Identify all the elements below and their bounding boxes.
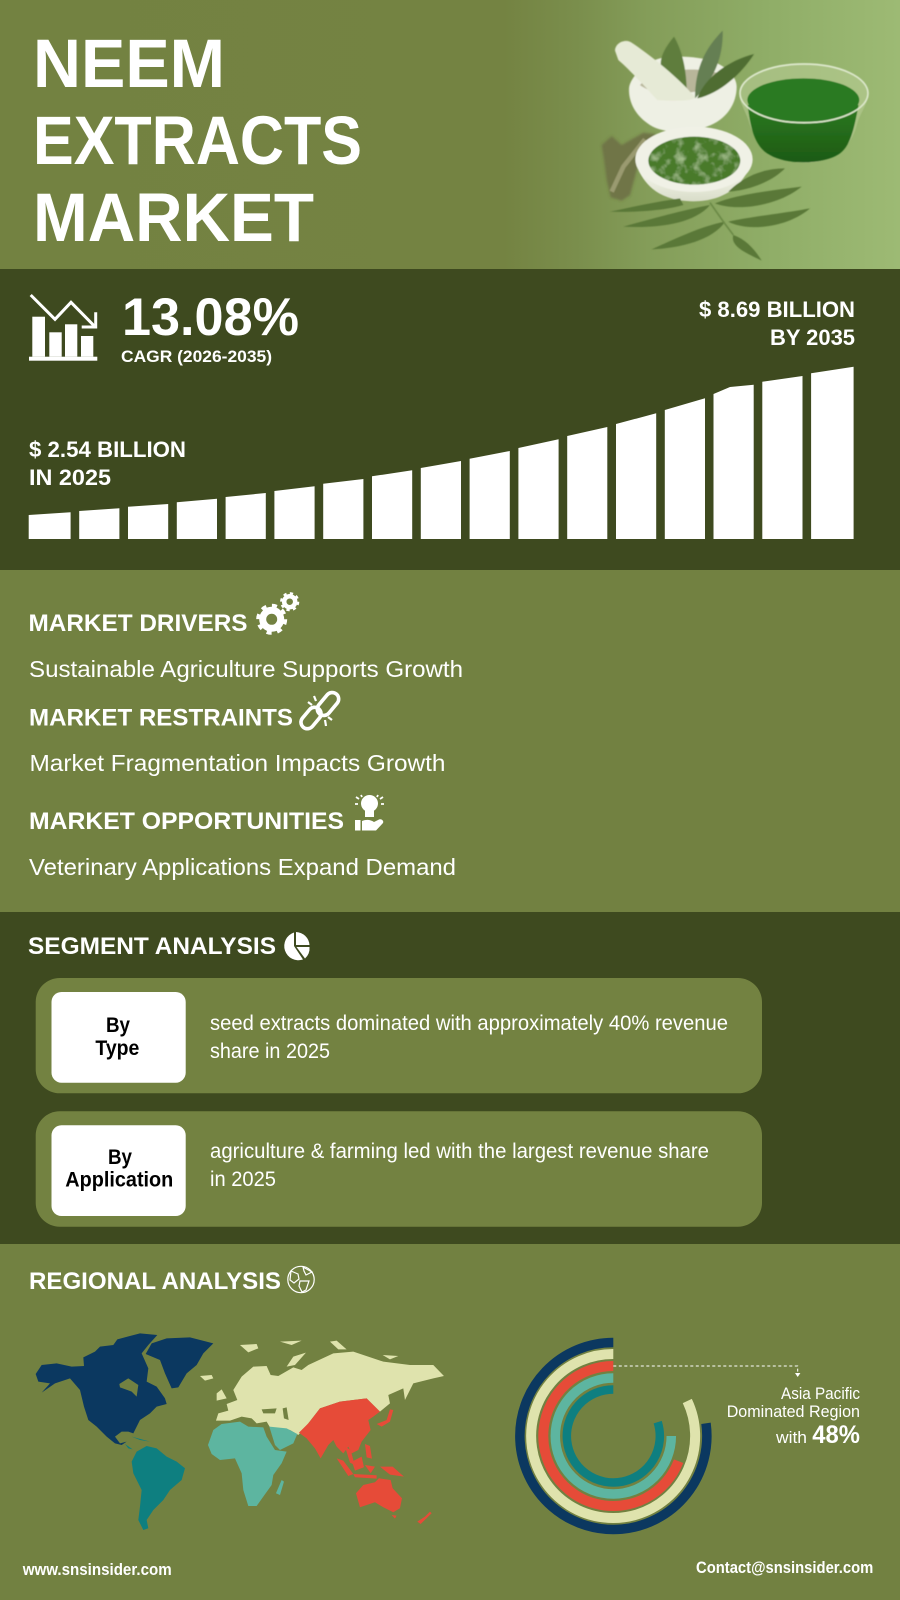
card: by type xyxy=(36,978,762,1093)
label: by application xyxy=(52,1125,186,1216)
start value label: $ 2.54 BILLION xyxy=(29,437,186,462)
CAGR label: CAGR (2026-2035) xyxy=(121,347,272,366)
map: North America xyxy=(36,1333,213,1445)
radial chart xyxy=(520,1342,707,1530)
callout line: Asia Pacific xyxy=(613,1366,800,1377)
label: by application: Application xyxy=(65,1168,173,1192)
panel: segment analysis xyxy=(0,912,900,1244)
callout: dominated region: with xyxy=(775,1429,807,1447)
callout: dominated region: Asia Pacific xyxy=(781,1385,860,1403)
mortar xyxy=(629,57,737,132)
icon: broken chain xyxy=(298,690,341,731)
start value label xyxy=(29,437,186,490)
callout: dominated region: Dominated Region xyxy=(727,1403,860,1421)
leaves in mortar xyxy=(661,37,687,88)
end value label: $ 8.69 BILLION xyxy=(699,297,855,322)
end value label: BY 2035 xyxy=(770,325,855,350)
text: driver: Sustainable Agriculture Supports Growth xyxy=(29,656,463,682)
seas xyxy=(262,1407,289,1420)
icon: bulb in hand xyxy=(355,795,384,830)
text: by type: share in 2025 xyxy=(210,1040,330,1063)
Hudson Bay xyxy=(119,1378,138,1397)
photo: neem mortar, bowls and leaves xyxy=(602,31,869,261)
title: NEEM xyxy=(33,25,225,102)
text: by type: seed extracts dominated with approximately 40% revenue xyxy=(210,1012,728,1035)
icon: pie chart xyxy=(284,932,310,960)
title: MARKET xyxy=(33,179,314,256)
map: Europe and North Asia xyxy=(200,1341,444,1435)
callout: dominated region: 48% xyxy=(812,1421,860,1449)
end value label xyxy=(699,297,855,350)
heading: segment analysis: SEGMENT ANALYSIS xyxy=(28,933,276,960)
icon: CAGR chart xyxy=(29,295,97,361)
card: by application xyxy=(36,1111,762,1227)
glass bowl xyxy=(739,63,869,163)
title: EXTRACTS xyxy=(33,102,362,179)
icon: globe xyxy=(288,1266,314,1293)
heading: market drivers: MARKET DRIVERS xyxy=(28,610,248,637)
twigs xyxy=(602,133,656,201)
label: by type: By xyxy=(106,1013,130,1037)
label: by type xyxy=(52,992,186,1083)
label: by application: By xyxy=(108,1145,132,1169)
title xyxy=(33,25,362,256)
text: by application: in 2025 xyxy=(210,1168,276,1191)
text: restraint: Market Fragmentation Impacts Growth xyxy=(30,750,446,776)
icon: gears xyxy=(258,593,298,633)
map: South America xyxy=(125,1437,185,1530)
neem leaves bottom xyxy=(610,168,810,261)
heading: regional analysis: REGIONAL ANALYSIS xyxy=(29,1268,281,1295)
callout: dominated region xyxy=(727,1385,860,1449)
market size panel xyxy=(0,269,900,570)
bar chart: market growth xyxy=(29,367,854,539)
start value label: IN 2025 xyxy=(29,465,111,490)
map: Africa and Arabia xyxy=(208,1422,297,1506)
header panel xyxy=(0,0,900,269)
map: Asia Pacific xyxy=(299,1398,432,1524)
heading: market opportunities: MARKET OPPORTUNITIES xyxy=(29,808,344,835)
world map xyxy=(36,1333,444,1530)
text: by application: agriculture & farming led with the largest revenue share xyxy=(210,1140,709,1163)
pestle xyxy=(615,41,695,101)
text: by application xyxy=(210,1140,709,1191)
paste bowl xyxy=(638,170,748,201)
footer: website: www.snsinsider.com xyxy=(22,1560,172,1579)
label: by type: Type xyxy=(95,1036,139,1060)
heading: market restraints: MARKET RESTRAINTS xyxy=(29,704,293,732)
CAGR value: 13.08% xyxy=(122,288,299,347)
footer: contact: Contact@snsinsider.com xyxy=(696,1558,873,1577)
text: by type xyxy=(210,1012,728,1063)
panel: market drivers, restraints, opportunities xyxy=(28,593,463,880)
text: opportunity: Veterinary Applications Expand Demand xyxy=(29,854,456,880)
panel: regional analysis xyxy=(29,1266,860,1530)
